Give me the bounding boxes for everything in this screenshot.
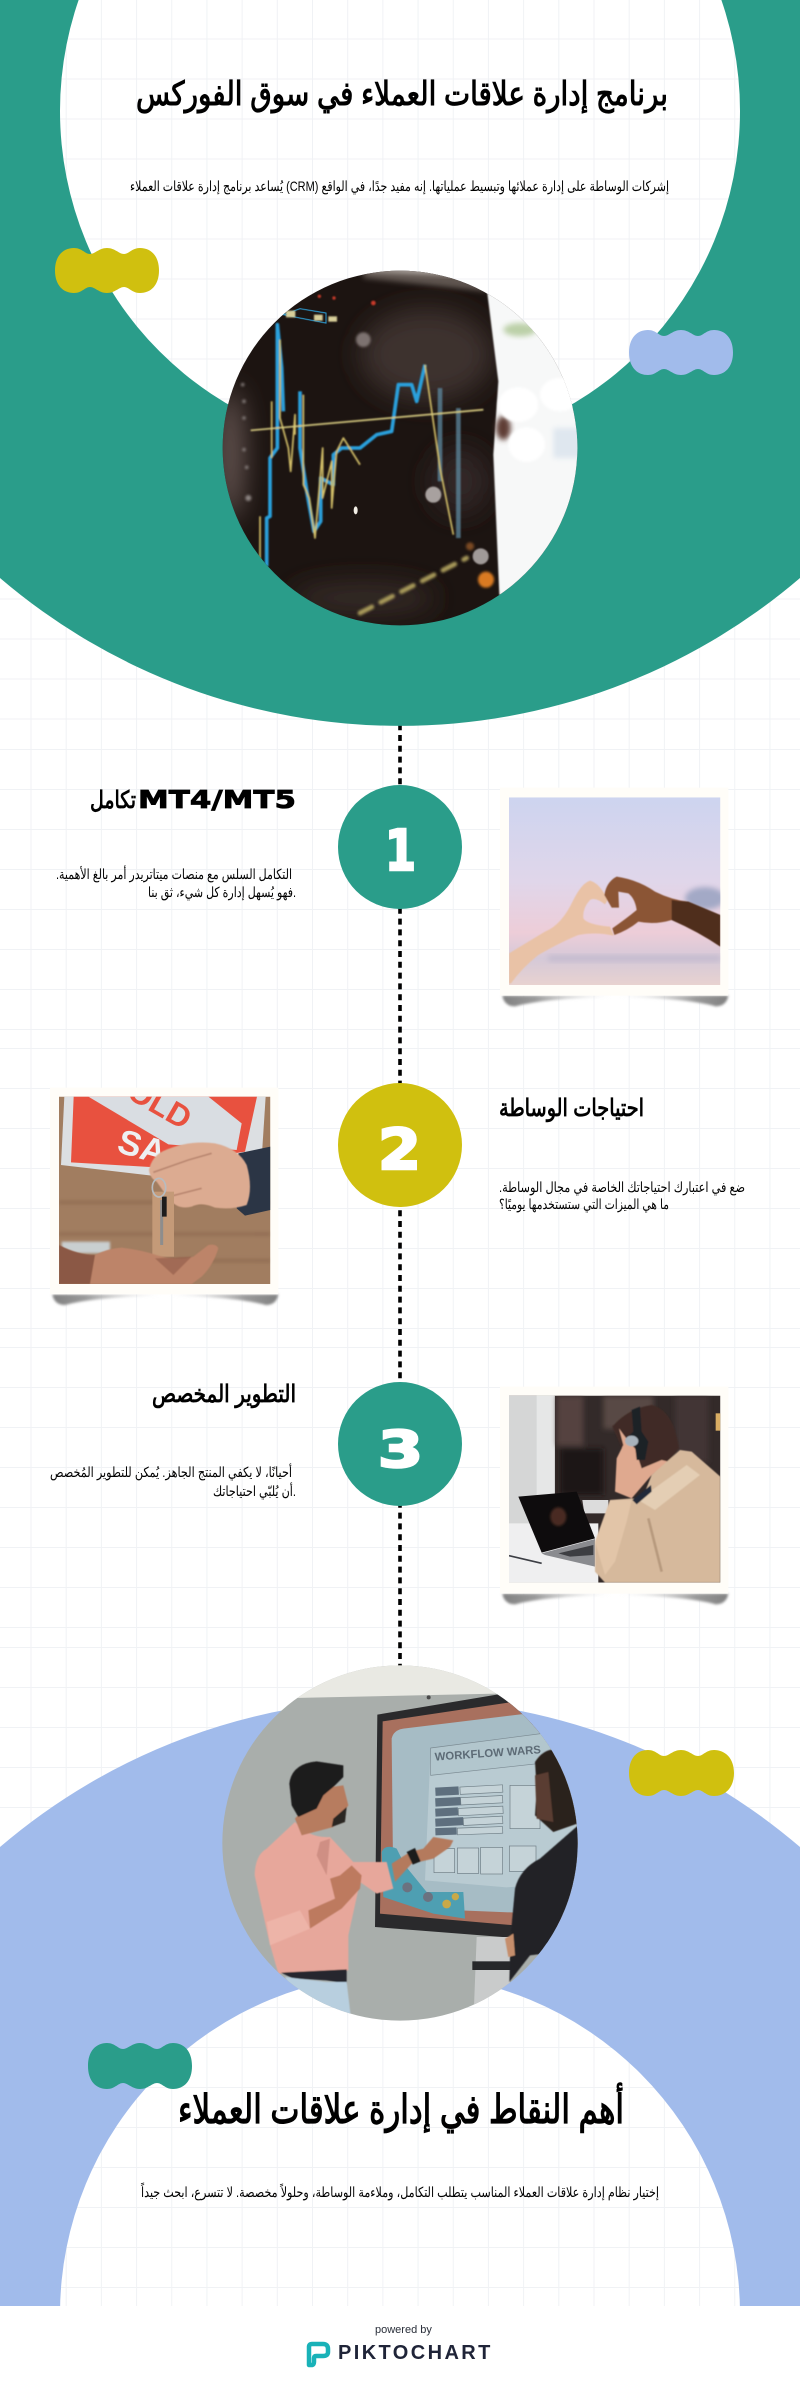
step 3 body text xyxy=(50,1462,296,1500)
title: برنامج إدارة علاقات العملاء في سوق الفوركس xyxy=(136,75,668,114)
line 2: أن يُلبّي احتياجاتك. xyxy=(213,1481,296,1499)
powered by: powered by xyxy=(375,2324,432,2336)
decorative blob: teal bottom xyxy=(88,2043,192,2089)
wordmark: PIKTOCHART xyxy=(338,2342,493,2364)
step 1 number badge: 1 xyxy=(385,819,416,884)
photo: trading chart xyxy=(162,270,578,1504)
photo: presentation at screen: WORKFLOW WARS xyxy=(434,1744,542,1764)
step 2 photo: key handover xyxy=(50,1083,734,1988)
decorative blob: yellow bottom xyxy=(629,1750,734,1796)
step 3 number badge: 3 xyxy=(378,1421,423,1479)
step 2 photo: key handover: OLD xyxy=(122,1072,198,1137)
line 2: ما هي الميزات التي ستستخدمها يوميًا؟ xyxy=(499,1196,669,1213)
step 2 number badge xyxy=(338,1083,462,1207)
step 1 body text xyxy=(56,864,296,901)
step 2 number badge: 2 xyxy=(378,1118,421,1183)
step 1 number badge xyxy=(338,785,462,909)
line 1: ضع في اعتبارك احتياجاتك الخاصة في مجال الوساطة. xyxy=(499,1179,745,1196)
step 3 heading: التطوير المخصص xyxy=(152,1381,296,1409)
step 3 photo: man with headset xyxy=(500,1386,730,1606)
step 2 heading: احتياجات الوساطة xyxy=(499,1095,644,1123)
footer branding xyxy=(0,2306,800,2386)
step 1 photo: hands heart xyxy=(500,788,730,1008)
photo: presentation at screen xyxy=(222,1665,578,2021)
closing title: أهم النقاط في إدارة علاقات العملاء xyxy=(178,2081,624,2134)
icon: piktochart logo xyxy=(306,2342,330,2368)
top teal arc xyxy=(0,0,800,726)
step 1 heading xyxy=(90,785,296,814)
bottom blue arc xyxy=(0,1710,800,2306)
heading label: word: تكامل xyxy=(90,787,136,814)
step 2 photo: key handover: SA xyxy=(113,1123,170,1173)
line 2: فهو يُسهل إدارة كل شيء، ثق بنا. xyxy=(148,884,296,901)
step 3 number badge xyxy=(338,1382,462,1506)
line 1: أحيانًا، لا يكفي المنتج الجاهز. يُمكن للتطوير المُخصص xyxy=(50,1462,292,1481)
decorative blob: blue top xyxy=(629,330,733,375)
decorative blob: yellow top xyxy=(55,248,159,293)
heading label: platform names: MT4/MT5 xyxy=(138,785,296,814)
closing text: إختيار نظام إدارة علاقات العملاء المناسب يتطلب التكامل، وملاءمة الوساطة، وحلولاً مخصصة. لا تتسرع، ابحث جيداً xyxy=(141,2182,659,2201)
step 2 body text xyxy=(499,1179,745,1213)
line 1: التكامل السلس مع منصات ميتاتريدر أمر بالغ الأهمية. xyxy=(56,864,292,883)
intro text: إشركات الوساطة على إدارة عملائها وتبسيط عملياتها. إنه مفيد جدًا، في الواقع (CRM) يُساعد برنامج إدارة علاقات العملاء xyxy=(130,178,669,195)
